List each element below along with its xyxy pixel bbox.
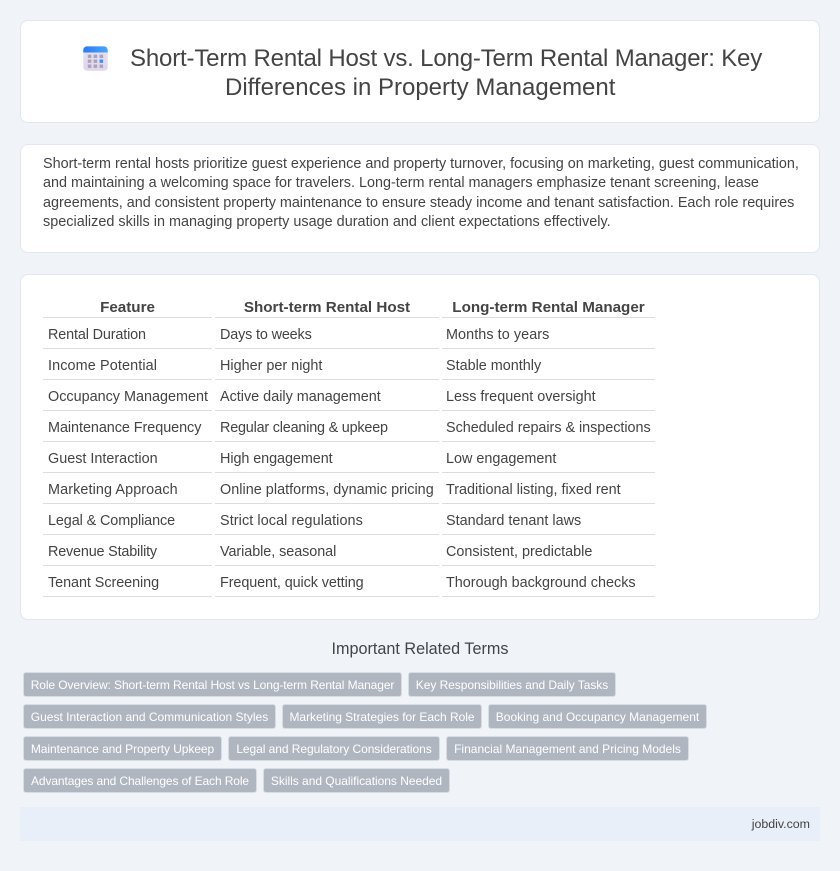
comparison table: Frequent, quick vetting — [220, 575, 364, 591]
footer source: jobdiv.com — [752, 817, 810, 831]
comparison table: Traditional listing, fixed rent — [446, 482, 621, 498]
comparison table: Less frequent oversight — [446, 389, 596, 405]
comparison table: Standard tenant laws — [446, 513, 581, 529]
comparison table: Income Potential — [48, 358, 157, 374]
tag list: Financial Management and Pricing Models — [454, 742, 681, 756]
comparison table: Legal & Compliance — [48, 513, 175, 529]
tag list — [23, 672, 707, 793]
comparison table: Short-term Rental Host — [244, 299, 410, 316]
comparison table: Maintenance Frequency — [48, 420, 201, 436]
comparison table: Guest Interaction — [48, 451, 158, 467]
intro paragraph: Short-term rental hosts prioritize guest experience and property turnover, focusing on marketing, guest communication, — [43, 156, 799, 172]
comparison table: Strict local regulations — [220, 513, 363, 529]
footer bar — [20, 807, 820, 841]
comparison table: Long-term Rental Manager — [452, 299, 645, 316]
comparison table: Days to weeks — [220, 327, 312, 343]
intro paragraph: specialized skills in managing property usage duration and client expectations effectively. — [43, 214, 611, 230]
title — [130, 45, 762, 101]
comparison table: Thorough background checks — [446, 575, 636, 591]
comparison table: Low engagement — [446, 451, 556, 467]
tag list: Advantages and Challenges of Each Role — [31, 774, 249, 788]
comparison table: Stable monthly — [446, 358, 541, 374]
comparison table: Marketing Approach — [48, 482, 178, 498]
icon: calendar — [83, 46, 108, 71]
tag list: Maintenance and Property Upkeep — [31, 742, 214, 756]
tag list: Role Overview: Short-term Rental Host vs Long-term Rental Manager — [31, 678, 394, 692]
intro paragraph: agreements, and consistent property maintenance to ensure steady income and tenant satisfaction. Each role requires — [43, 195, 794, 211]
panel: intro text — [20, 144, 820, 253]
comparison table — [43, 299, 655, 597]
comparison table: Feature — [100, 299, 155, 316]
tag list: Legal and Regulatory Considerations — [236, 742, 432, 756]
tag list: Booking and Occupancy Management — [496, 710, 699, 724]
tag list: Marketing Strategies for Each Role — [289, 710, 475, 724]
tag list: Guest Interaction and Communication Styles — [31, 710, 268, 724]
title: Short-Term Rental Host vs. Long-Term Rental Manager: Key — [130, 45, 762, 72]
comparison table: Variable, seasonal — [220, 544, 336, 560]
tag list: Key Responsibilities and Daily Tasks — [416, 678, 608, 692]
comparison table: Regular cleaning & upkeep — [220, 420, 388, 436]
comparison table: Consistent, predictable — [446, 544, 592, 560]
intro paragraph: and maintaining a welcoming space for travelers. Long-term rental managers emphasize tenant screening, lease — [43, 175, 759, 191]
comparison table: Active daily management — [220, 389, 381, 405]
title: Differences in Property Management — [225, 74, 615, 101]
comparison table: Revenue Stability — [48, 544, 157, 560]
comparison table: High engagement — [220, 451, 333, 467]
panel: comparison table — [20, 274, 820, 620]
tag list: Skills and Qualifications Needed — [271, 774, 442, 788]
comparison table: Tenant Screening — [48, 575, 159, 591]
comparison table: Higher per night — [220, 358, 322, 374]
panel: header card — [20, 20, 820, 123]
comparison table: Online platforms, dynamic pricing — [220, 482, 434, 498]
intro paragraph — [43, 156, 799, 230]
comparison table: Rental Duration — [48, 327, 146, 343]
comparison table: Occupancy Management — [48, 389, 208, 405]
comparison table: Months to years — [446, 327, 549, 343]
comparison table: Scheduled repairs & inspections — [446, 420, 651, 436]
heading: important related terms: Important Related Terms — [332, 640, 508, 658]
